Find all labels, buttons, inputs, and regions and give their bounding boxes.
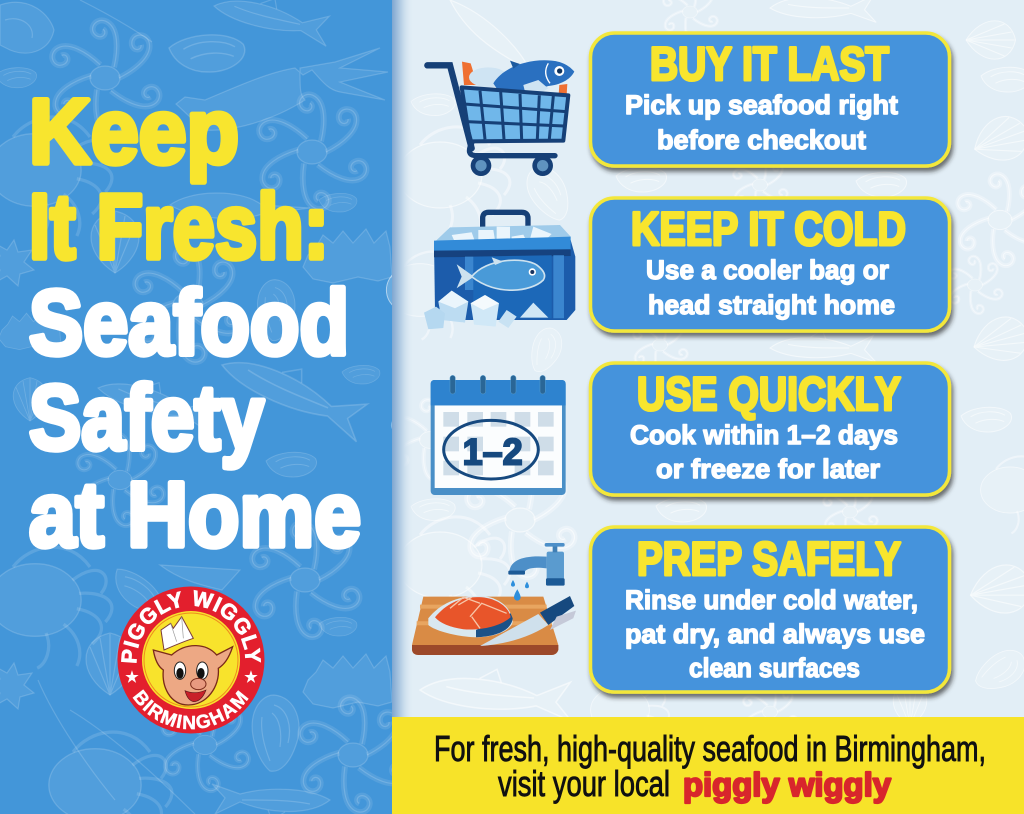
- card heading: PREP SAFELY: [637, 532, 901, 585]
- card body: Pick up seafood right: [625, 90, 898, 120]
- icon: shopping cart with fish: [427, 60, 574, 174]
- icon: calendar 1-2 days: 1–2: [463, 431, 523, 473]
- card body: clean surfaces: [689, 653, 860, 683]
- panel: right pale background: [386, 0, 1024, 814]
- title line: It Fresh: It Fresh:: [29, 176, 329, 278]
- card body: Cook within 1–2 days: [630, 420, 898, 450]
- card: buy it last: [590, 33, 950, 166]
- card body: Use a cooler bag or: [646, 255, 889, 285]
- title: [29, 81, 361, 566]
- card body: pat dry, and always use: [625, 619, 925, 649]
- title line: Keep: Keep: [29, 81, 239, 183]
- card body: head straight home: [648, 290, 895, 320]
- logo: Piggly Wiggly Birmingham: ★: [244, 669, 258, 686]
- title line: at Home: at Home: [29, 464, 361, 566]
- card body: or freeze for later: [656, 454, 880, 484]
- brand name: piggly wiggly: [683, 766, 892, 803]
- logo: Piggly Wiggly Birmingham: ★: [125, 669, 139, 686]
- icon: cutting board, salmon, knife and tap: [412, 543, 576, 655]
- footer text with brand: visit your local: [498, 763, 670, 804]
- logo: Piggly Wiggly Birmingham: BIRMINGHAM: [132, 689, 249, 730]
- card heading: KEEP IT COLD: [631, 202, 906, 255]
- card: prep safely: [590, 527, 950, 692]
- title line: Safety: Safety: [29, 367, 264, 469]
- logo: Piggly Wiggly Birmingham: PIGGLY WIGGLY: [121, 590, 262, 663]
- icon: calendar 1-2 days: [431, 375, 566, 495]
- title line: Seafood: Seafood: [29, 272, 349, 374]
- icon: cooler bag with fish and ice: [424, 212, 575, 329]
- logo: Piggly Wiggly Birmingham: [118, 586, 264, 734]
- card body: Rinse under cold water,: [625, 585, 918, 615]
- card: keep it cold: [590, 198, 950, 331]
- card body: before checkout: [657, 125, 866, 155]
- pig face: [153, 617, 233, 705]
- card heading: USE QUICKLY: [637, 367, 901, 420]
- card: use quickly: [590, 363, 950, 495]
- card heading: BUY IT LAST: [650, 37, 889, 90]
- panel: left blue background: [0, 0, 411, 814]
- footer banner: [392, 717, 1024, 814]
